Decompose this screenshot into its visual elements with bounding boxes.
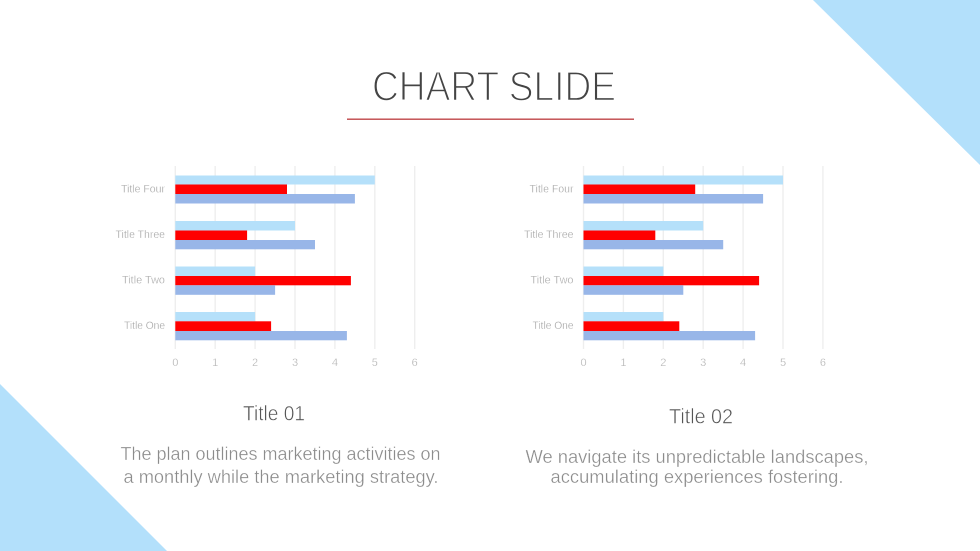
axis labels: 1 — [212, 357, 218, 369]
category labels: Title Three — [524, 229, 574, 241]
bars: Title Three — [175, 221, 315, 249]
chart 2 — [524, 166, 826, 369]
bars: Title Two — [584, 266, 759, 295]
category labels — [524, 184, 574, 332]
heading: Title 02: Title 02 — [669, 406, 733, 428]
axis labels: 5 — [372, 357, 378, 369]
category labels: Title Two — [530, 274, 574, 286]
category labels: Title One — [532, 320, 574, 332]
text block: left description — [120, 444, 440, 487]
axis labels: 0 — [172, 357, 178, 369]
axis labels: 2 — [660, 357, 666, 369]
axis labels: 1 — [620, 357, 626, 369]
category labels: Title Two — [122, 274, 165, 286]
heading: Title 01: Title 01 — [243, 402, 305, 426]
axis labels: 2 — [252, 357, 258, 369]
text block: right description: We navigate its unpredictable landscapes, — [526, 447, 868, 467]
text block: left description: The plan outlines marketing activities on — [120, 444, 440, 464]
axis labels: 3 — [292, 357, 298, 369]
axis labels: 6 — [820, 357, 826, 369]
bars: Title Four — [175, 176, 375, 204]
bars: Title One — [175, 312, 347, 340]
text block: right description — [526, 447, 868, 487]
category labels: Title Three — [116, 229, 165, 241]
category labels — [116, 184, 165, 332]
axis labels: 4 — [740, 357, 746, 369]
corner triangle: bottom left — [0, 384, 167, 551]
title: CHART SLIDE — [372, 62, 616, 110]
category labels: Title Four — [121, 184, 165, 196]
axis labels: 6 — [412, 357, 418, 369]
axis labels: 3 — [700, 357, 706, 369]
axis labels — [172, 357, 418, 369]
text block: right description: accumulating experiences fostering. — [550, 467, 844, 487]
bars: Title Three — [584, 221, 723, 249]
text block: left description: a monthly while the marketing strategy. — [124, 467, 438, 487]
axis labels: 0 — [580, 357, 587, 369]
category labels: Title Four — [530, 184, 574, 196]
axis labels: 5 — [780, 357, 786, 369]
title underline — [347, 118, 634, 120]
category labels: Title One — [124, 320, 165, 332]
chart 1 — [116, 166, 418, 369]
bars: Title One — [584, 312, 755, 340]
corner triangle: top right — [813, 0, 980, 165]
axis labels — [580, 357, 826, 369]
bars: Title Two — [175, 266, 351, 295]
bars: Title Four — [584, 176, 783, 204]
axis labels: 4 — [332, 357, 338, 369]
